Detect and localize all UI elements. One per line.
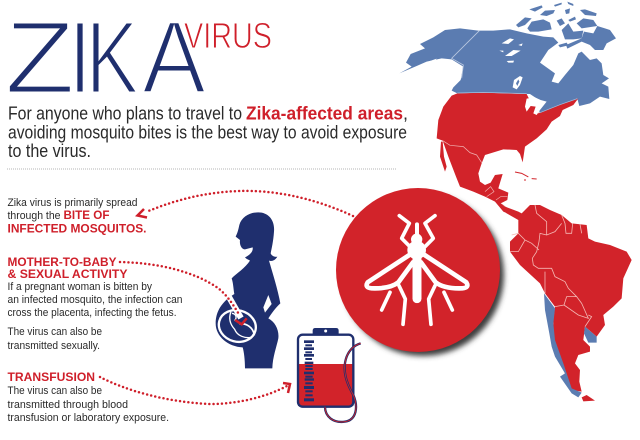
- intro text: ,: [403, 104, 408, 124]
- title: ZIKA VIRUS: I: [68, 0, 92, 115]
- blood bag tube: [325, 343, 361, 422]
- title: ZIKA VIRUS: A: [142, 0, 206, 115]
- map: north america: [399, 2, 616, 216]
- text block: mother-to-baby and sexual activity: an infected mosquito, the infection can: [8, 294, 182, 306]
- map: usa, mexico and central america: [437, 93, 578, 216]
- map: uruguay: [584, 327, 597, 343]
- arrow: transfusion to blood bag: [100, 377, 290, 404]
- title: ZIKA VIRUS: VIRUS: [184, 15, 272, 56]
- map: caribbean: [515, 172, 537, 180]
- circle shadow: [342, 194, 504, 356]
- text block: transfusion: The virus can also be: [8, 385, 102, 397]
- text block: mother-to-baby and sexual activity: The virus can also be: [8, 326, 102, 338]
- map: country borders: [510, 205, 592, 327]
- text block: bite of infected mosquitos: [8, 197, 146, 236]
- text block: mother-to-baby and sexual activity: MOTHER-TO-BABY: [8, 257, 117, 269]
- arrow: mother-to-baby to fetus: [120, 262, 247, 324]
- map: chile: [544, 293, 582, 397]
- text block: transfusion: transmitted through blood: [8, 399, 128, 411]
- icon: blood bag: [298, 328, 361, 422]
- intro text: [8, 104, 408, 161]
- map: arctic islands: [516, 2, 616, 50]
- text block: mother-to-baby and sexual activity: cross the placenta, infecting the fetus.: [8, 307, 176, 319]
- text block: transfusion: transfusion or laboratory exposure.: [8, 412, 169, 424]
- map: south america: [497, 200, 632, 401]
- intro text: avoiding mosquito bites is the best way to avoid exposure: [8, 122, 407, 142]
- title: ZIKA VIRUS: [4, 0, 272, 115]
- text block: bite of infected mosquitos: through the: [8, 210, 60, 222]
- text block: transfusion: [8, 372, 169, 424]
- title: ZIKA VIRUS: Z: [4, 0, 75, 115]
- icon: pregnant woman silhouette: [215, 212, 280, 368]
- map: great lakes and baja: [440, 92, 577, 210]
- text block: mother-to-baby and sexual activity: [8, 257, 182, 352]
- icon: mosquito: [367, 216, 467, 324]
- intro text: Zika-affected areas: [246, 104, 403, 124]
- text block: mother-to-baby and sexual activity: If a pregnant woman is bitten by: [8, 281, 152, 293]
- text block: transfusion: TRANSFUSION: [8, 372, 95, 384]
- text block: mother-to-baby and sexual activity: & SEXUAL ACTIVITY: [8, 269, 128, 281]
- mosquito badge: [336, 188, 500, 352]
- title: ZIKA VIRUS: K: [86, 0, 139, 115]
- text block: bite of infected mosquitos: INFECTED MOSQUITOS.: [8, 224, 146, 236]
- text block: bite of infected mosquitos: Zika virus is primarily spread: [8, 197, 138, 209]
- blood bag scale: [304, 340, 314, 401]
- map: tierra del fuego: [582, 395, 595, 401]
- intro text: to the virus.: [8, 141, 91, 161]
- icon: fetus in womb: [215, 306, 259, 346]
- arrow: mosquito to bite text: [138, 191, 353, 218]
- text block: bite of infected mosquitos: BITE OF: [64, 210, 110, 222]
- intro text: For anyone who plans to travel to: [8, 104, 242, 124]
- text block: mother-to-baby and sexual activity: transmitted sexually.: [8, 340, 100, 352]
- map: canada and alaska: [399, 28, 609, 113]
